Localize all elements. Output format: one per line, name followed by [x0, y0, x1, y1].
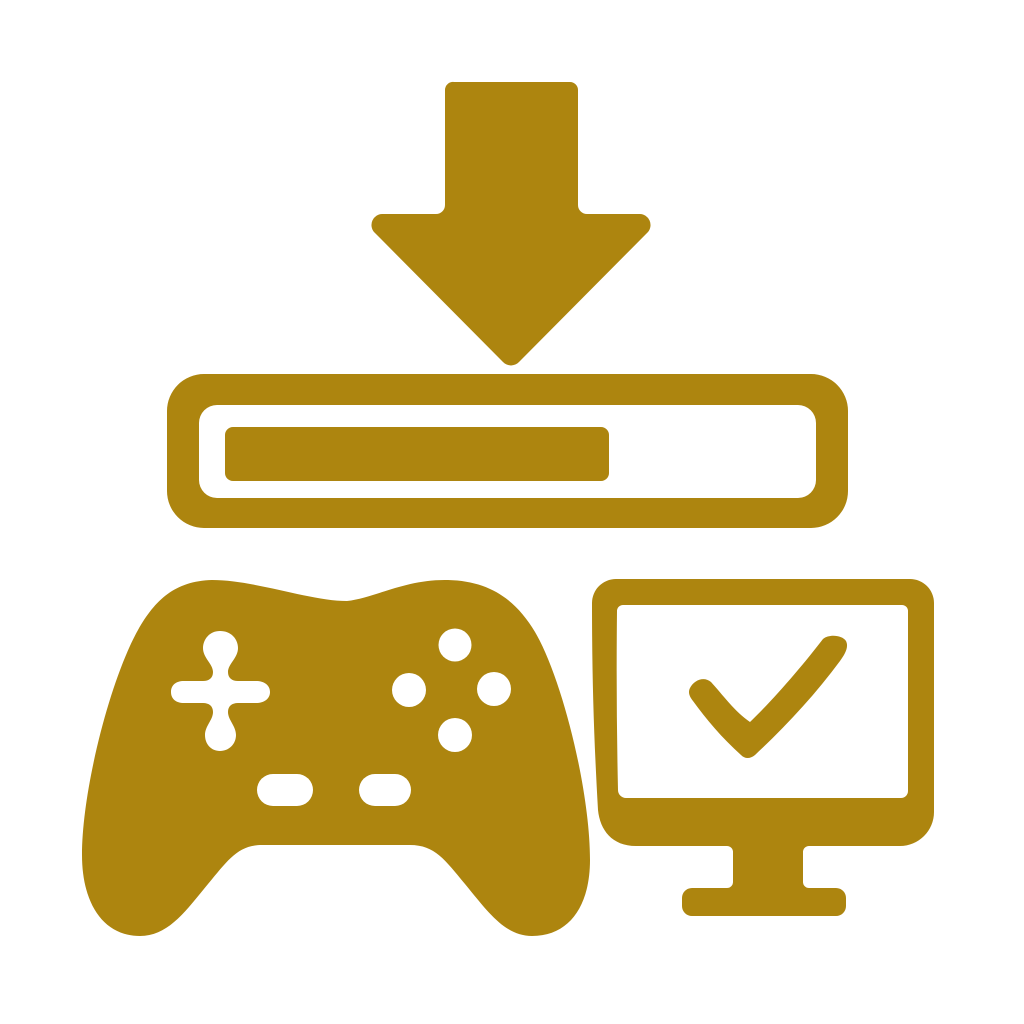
- menu buttons: [257, 774, 411, 806]
- face buttons: [392, 628, 511, 752]
- d-pad: [171, 631, 270, 751]
- progress bar: [167, 374, 848, 528]
- icon: monitor with check mark: [592, 579, 934, 916]
- check mark: [689, 636, 847, 758]
- icon: game controller: [82, 580, 590, 936]
- controller body: [82, 580, 590, 936]
- icon: download arrow: [371, 82, 651, 365]
- progress bar fill: [225, 427, 609, 481]
- monitor body: [592, 579, 934, 916]
- progress bar frame: [167, 374, 848, 528]
